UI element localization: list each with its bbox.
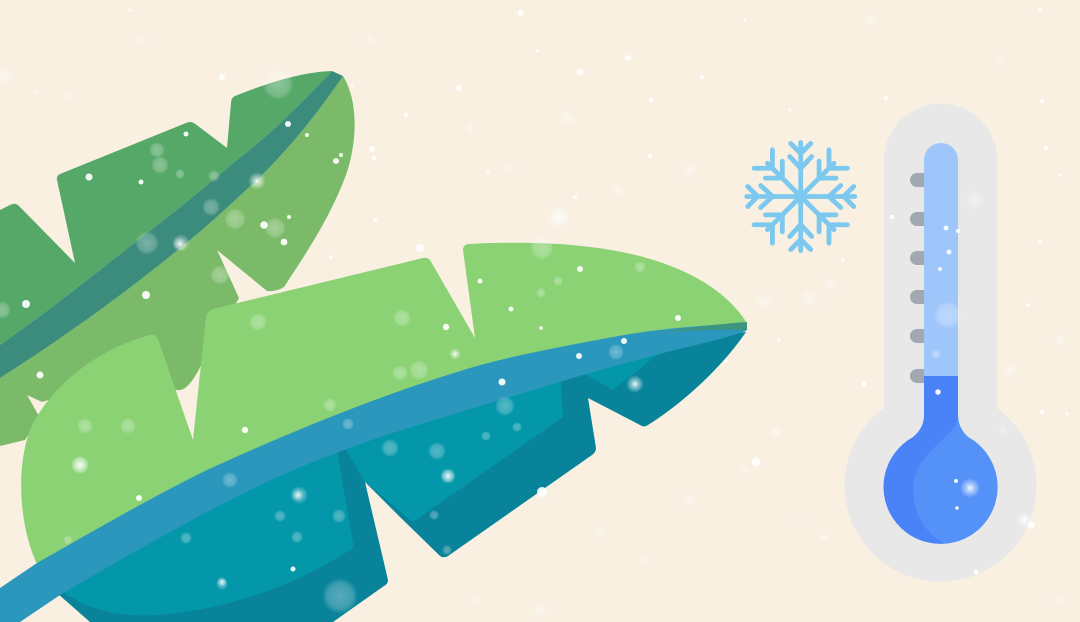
front leaf: middle light teal panel <box>343 370 563 522</box>
front leaf: right light teal panel <box>578 350 663 390</box>
thermometer: mercury and bulb <box>884 376 998 544</box>
thermometer: scale ticks <box>910 173 934 383</box>
front leaf: blue midrib <box>0 323 747 622</box>
snow: soft blurred flakes <box>0 68 962 614</box>
front leaf: dark green seam near tip <box>660 322 747 333</box>
thermometer: outer casing <box>844 104 1036 582</box>
front leaf: dark teal underside <box>57 332 746 622</box>
back leaf: midrib <box>0 71 343 378</box>
front leaf <box>0 243 747 622</box>
icon: snowflake <box>747 142 855 250</box>
thermometer: bulb highlight <box>913 415 998 544</box>
front leaf: left light teal panel <box>63 450 353 616</box>
back leaf <box>0 71 355 446</box>
icon: thermometer <box>844 104 1036 582</box>
snow: glowing flakes <box>71 172 1032 587</box>
thermometer: empty tube <box>924 143 958 380</box>
back leaf: upper dark green half <box>0 71 332 345</box>
front leaf: bright green top <box>21 243 747 566</box>
back leaf: lower olive half <box>0 76 355 446</box>
